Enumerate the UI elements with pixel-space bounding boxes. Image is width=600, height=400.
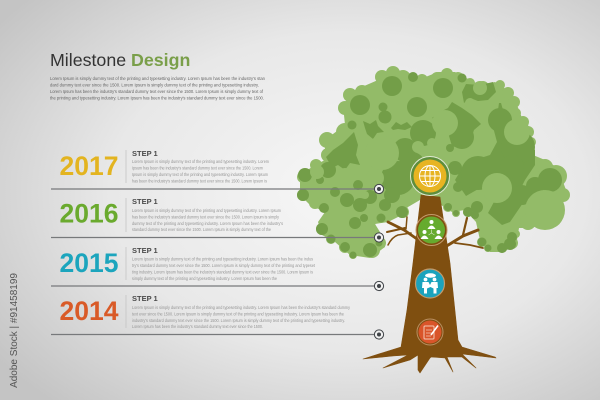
timeline row: 2015: Lorem Ipsum is simply dummy text of the printing and typesetting industry. Lorem Ipsum has been the indus <box>132 256 313 262</box>
icon: team hierarchy <box>416 214 447 246</box>
title: Milestone Design <box>50 50 190 70</box>
timeline row: 2015: 2015 <box>60 248 118 278</box>
intro text block: the printing and typesetting industry. Lorem Ipsum has been the industry's standard dummy text ever since the 1500. <box>50 96 264 100</box>
intro text block: Lorem Ipsum is simply dummy text of the printing and typesetting industry. Lorem Ipsum has been the industry's stan <box>50 76 266 81</box>
watermark credit: Adobe Stock | #91458199 <box>9 273 20 388</box>
timeline row: 2014: 2014 <box>60 296 119 326</box>
icon: two people <box>416 269 444 298</box>
timeline row: 2016 <box>51 197 384 242</box>
timeline row: 2016: 2016 <box>60 198 118 228</box>
intro text block: dard dummy text ever since the 1500. Lorem Ipsum is simply dummy text of the printing and typesetting industry. <box>50 82 259 88</box>
timeline row: 2015: simply dummy text of the printing and typesetting industry. Lorem Ipsum has been the <box>132 276 278 281</box>
timeline row: 2014: Lorem Ipsum has been the industry's standard dummy text ever since the 1500. <box>132 324 263 329</box>
branches <box>387 217 483 248</box>
timeline row: 2016: Lorem Ipsum is simply dummy text of the printing and typesetting industry. Lorem Ipsum <box>132 208 281 213</box>
timeline row: 2014: text ever since the 1500. Lorem Ipsum is simply dummy text of the printing and typesetting industry. Lorem Ipsum has been the <box>132 312 345 316</box>
timeline row: 2017: STEP 1 <box>132 149 158 158</box>
intro text block <box>50 76 266 100</box>
timeline row: 2016: STEP 1 <box>132 197 158 206</box>
timeline row: 2015: try's standard dummy text ever since the 1500. Lorem Ipsum is simply dummy text of the printing and typeset <box>132 263 316 268</box>
timeline row: 2017: has been the industry's standard dummy text ever since the 1500. Lorem Ipsum is <box>132 178 267 184</box>
timeline row: 2017 <box>51 149 384 194</box>
icon: document and pen <box>417 319 443 345</box>
timeline row: 2017: Lorem Ipsum is simply dummy text of the printing and typesetting industry. Lorem <box>132 159 269 164</box>
timeline row: 2015: ting industry. Lorem Ipsum has been the industry's standard dummy text ever since the 1500. Lorem Ipsum is <box>132 270 313 274</box>
timeline row: 2016: standard dummy text ever since the 1500. Lorem Ipsum is simply dummy text of the <box>132 227 272 232</box>
timeline row: 2014: Lorem Ipsum is simply dummy text of the printing and typesetting industry. Lorem Ipsum has been the industry's standard dummy <box>132 305 351 310</box>
timeline row: 2014: STEP 1 <box>132 294 158 303</box>
tree trunk and roots <box>363 195 496 373</box>
icon: globe <box>410 156 450 196</box>
timeline row: 2014 <box>51 294 384 339</box>
timeline row: 2017: Ipsum is simply dummy text of the printing and typesetting industry. Lorem Ipsum <box>132 172 268 177</box>
timeline row: 2016: has been the industry's standard dummy text ever since the 1500. Lorem Ipsum is simply <box>132 214 280 220</box>
intro text block: Lorem Ipsum has been the industry's standard dummy text ever since the 1500. Lorem Ipsum is simply dummy text of <box>50 89 264 94</box>
timeline row: 2016: dummy text of the printing and typesetting industry. Lorem Ipsum has been the industry's <box>132 221 283 226</box>
timeline row: 2015: STEP 1 <box>132 246 158 255</box>
tree canopy <box>297 66 570 259</box>
timeline row: 2017: 2017 <box>60 151 118 181</box>
timeline row: 2014: industry's standard dummy text ever since the 1500. Lorem Ipsum is simply dummy text of the printing and typesetting industry. <box>132 318 345 323</box>
timeline row: 2017: Ipsum has been the industry's standard dummy text ever since the 1500. Lorem <box>132 166 263 170</box>
timeline row: 2015 <box>51 246 384 291</box>
